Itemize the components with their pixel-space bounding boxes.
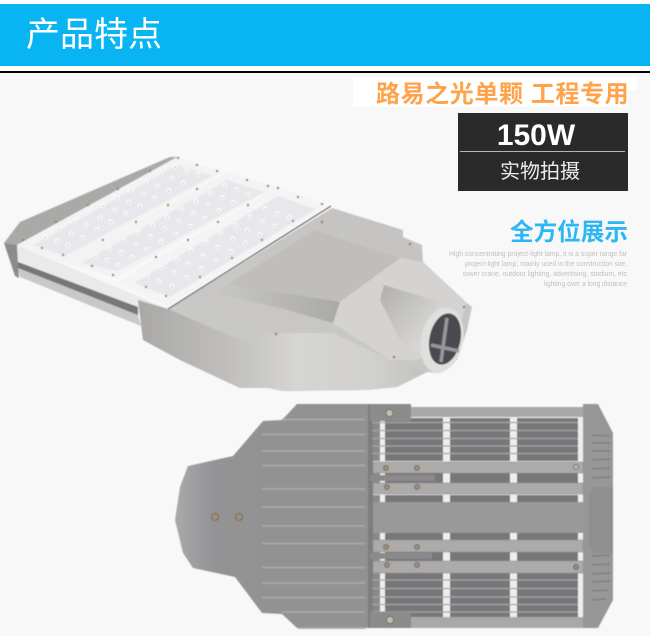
cable entry cone: [380, 285, 440, 353]
bottom bracket: [370, 612, 411, 628]
fin columns: [373, 418, 583, 617]
housing neck: [333, 258, 467, 360]
centre plate: [373, 502, 583, 533]
top bracket: [370, 404, 411, 421]
body seam: [368, 404, 373, 628]
lamp body top: [138, 208, 472, 391]
promo heading: 路易之光单颗 工程专用: [376, 80, 629, 108]
fin highlights: [372, 422, 578, 612]
heat sink backing: [373, 416, 583, 618]
LED module 3: [117, 187, 328, 307]
description text: High concentrating project-light lamp, it is a super range far: [449, 251, 628, 258]
top rail: [411, 407, 583, 417]
lamp rear edge: [4, 157, 178, 245]
end cap: [583, 404, 613, 628]
lamp side rail: [17, 245, 168, 326]
end cap fins: [592, 435, 610, 600]
body ribs: [262, 420, 365, 628]
section heading: 全方位展示: [510, 218, 628, 246]
title: 产品特点: [26, 16, 162, 54]
rear body casting: [175, 404, 373, 628]
module edge shadow: [168, 206, 331, 309]
raised front facet: [217, 284, 340, 323]
description text: [449, 251, 628, 288]
LED module 2: [65, 172, 275, 278]
LED module 1: [17, 157, 223, 263]
end cap centre: [589, 487, 613, 553]
cross bars: [373, 462, 583, 573]
raised top facet: [228, 230, 400, 302]
bottom rail: [411, 617, 583, 628]
top lamp photo: angled view: [4, 157, 472, 391]
header banner: [0, 0, 650, 73]
bolts: [212, 410, 578, 624]
badge caption: 实物拍摄: [500, 160, 580, 183]
bar tabs: [370, 475, 435, 559]
wattage: 150W: [497, 119, 576, 152]
power badge: [458, 113, 628, 191]
lamp end cap: [4, 243, 19, 278]
description text: project-light lamp, mainly used in the construction site,: [465, 261, 627, 268]
module screws: [22, 157, 465, 358]
description text: lighting over a long distance: [544, 281, 627, 288]
bottom lamp photo: rear view: [175, 404, 613, 628]
description text: tower crane, outdoor lighting, advertising, stadium, etc: [463, 271, 627, 278]
lamp body side: [138, 300, 427, 391]
cable entry lens: [415, 303, 469, 377]
